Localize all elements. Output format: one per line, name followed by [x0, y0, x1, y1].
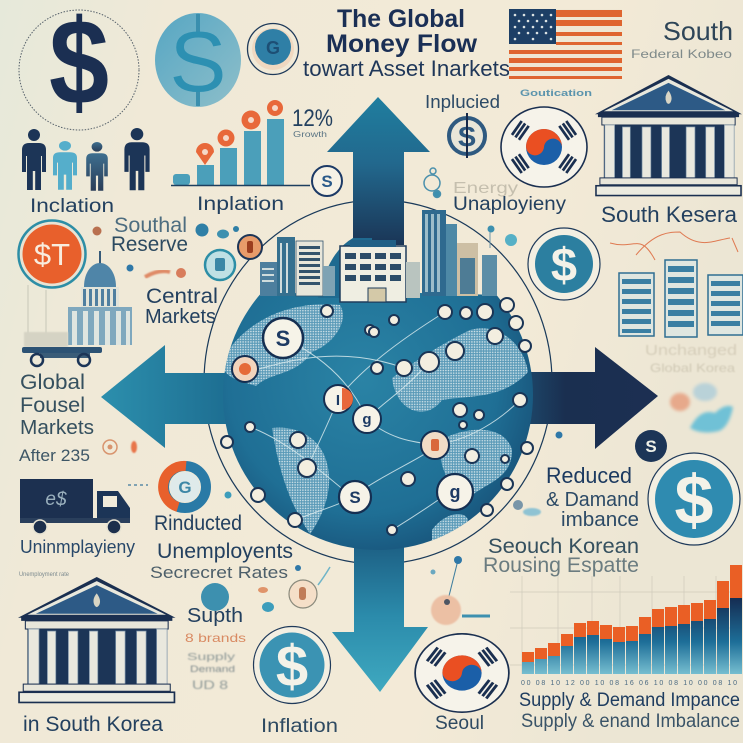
icon: navy S coin: S [645, 437, 657, 456]
icon: small teal link [424, 168, 440, 198]
label: Reduced & Demand imbalance: & Damand [546, 489, 639, 511]
flag: United States [509, 9, 622, 79]
title: The Global [337, 5, 465, 33]
icon: small coin ring [248, 24, 298, 74]
node: lower S coin: S [349, 488, 361, 507]
label: Supth & brands [185, 605, 246, 645]
flag: South Korea top [501, 107, 587, 187]
label: Seoul: Seoul [435, 713, 484, 734]
label: South Federal Korea: South [663, 16, 733, 46]
icon: orange $T coin: $T [34, 237, 70, 272]
icon: teal dollar disc [155, 13, 241, 110]
icon: teal ring coin [205, 250, 235, 280]
icon: truck: e$ [45, 489, 67, 510]
label: Inplucied: Inplucied [425, 92, 500, 112]
node: orange right coin [421, 431, 449, 459]
small orange ring icons [103, 440, 137, 454]
icon: teal blob [201, 583, 229, 611]
label: Seouch Korean Housing [483, 535, 639, 577]
label: Inflation: Inflation [261, 716, 338, 737]
label: tiny caption left: Unemployment rate [19, 572, 70, 578]
icon: large dollar coin right [648, 453, 740, 545]
icon: donut chart: G [178, 478, 192, 497]
label: Inplation: Inplation [197, 194, 284, 215]
icon: struck dollar coin [449, 113, 485, 158]
title: Money Flow [326, 30, 478, 58]
node: orange coin [232, 356, 258, 382]
faint scribble text: Demand [190, 664, 235, 674]
small icons around reserve [92, 224, 239, 278]
icon: dollar coin upper right: $ [551, 238, 577, 291]
icon: navy S coin [635, 430, 667, 462]
label: Reduced & Demand imbalance: Reduced [546, 463, 632, 488]
label: South Federal Korea: Federal Kobeo [631, 47, 732, 61]
label: Unemployieny: Uninmplayieny [20, 537, 135, 557]
label: Energy Unemployment: Energy [453, 180, 518, 197]
icon: large dollar coin right: $ [675, 461, 713, 539]
label: faint Unchanged Global Korea [645, 342, 737, 375]
node: lower S coin [339, 481, 371, 513]
faint scribble text [187, 652, 235, 692]
bar chart: growth [171, 100, 310, 186]
icon: small S coin: S [321, 172, 333, 191]
label: Rinducted Unemployents Rates: Unemployents [157, 540, 293, 563]
skyline buildings on globe [260, 210, 497, 302]
title [303, 5, 510, 81]
icon: large dollar in dotted circle [19, 0, 139, 130]
label: South Kesera: South Kesera [601, 202, 738, 227]
icon: donut chart [128, 466, 232, 508]
label: Seouch Korean Housing: Seouch Korean [488, 535, 639, 558]
label: Global Fousel Markets: Markets [20, 417, 94, 439]
icon: small coin ring: G [266, 38, 280, 58]
small icons near down arrow [258, 565, 330, 612]
icon: orange pin near down arrow [430, 556, 490, 625]
stacked bar chart: housing supply and demand: 00 08 10 12 00 10 08 16 06 10 08 10 00 08 10 [521, 680, 737, 687]
icon: faint truck under capitol [22, 347, 102, 366]
down arrow [332, 540, 428, 692]
node: S coin [263, 318, 303, 358]
label: Supth & brands: 8 brands [185, 631, 246, 645]
label: Rinducted Unemployents Rates: Secrecret Rates [150, 563, 288, 582]
label: Reduced & Demand imbalance: imbance [561, 509, 639, 531]
label: Global Fousel Markets: Fousel [20, 394, 85, 417]
label: Southal Reserve: Southal [114, 214, 187, 237]
stacked bar chart: housing supply and demand [510, 565, 742, 687]
icon: capitol building [24, 251, 132, 347]
up arrow [327, 97, 430, 245]
icon: central bank lower left [18, 577, 176, 702]
label: Central Markets: Markets [145, 306, 216, 328]
node: g coin: g [362, 411, 372, 428]
label: Energy Unemployment [453, 180, 567, 215]
faint scribble text: UD 8 [192, 678, 228, 692]
dots near skyline [488, 226, 517, 248]
label: Global Fousel Markets: Global [20, 371, 85, 394]
label: Inclation: Inclation [30, 196, 114, 217]
small icon: dotted link near globe base [513, 432, 562, 516]
continents [222, 304, 528, 548]
right arrow [515, 347, 658, 449]
icon: truck [20, 479, 130, 534]
node: g coin [353, 405, 381, 433]
label: Central Markets: Central [146, 285, 218, 308]
label: Southal Reserve: Reserve [111, 233, 188, 256]
orbit ring around globe [204, 200, 552, 564]
icon: dollar coin bottom [254, 626, 330, 704]
label: faint Unchanged Global Korea: Unchanged [645, 342, 737, 359]
icon: teal dollar disc: S [170, 15, 226, 110]
label: 12% growth [292, 105, 333, 139]
decorative blobs right [670, 383, 733, 432]
flag: Seoul South Korea [415, 634, 509, 712]
label: Reduced & Demand imbalance [546, 463, 639, 531]
label: Supth & brands: Supth [187, 605, 243, 627]
icon: central bank top right [595, 75, 742, 196]
label: in South Korea: in South Korea [23, 713, 163, 736]
title: towart Asset Inarkets [303, 56, 510, 81]
network nodes [221, 298, 533, 535]
node: g right coin [437, 474, 473, 510]
icon: small S coin [312, 166, 342, 196]
node: g right coin: g [450, 482, 460, 502]
node: I coin [324, 385, 353, 413]
icon: dollar coin upper right [528, 228, 600, 300]
left arrow [101, 345, 240, 448]
network lines [245, 312, 520, 530]
icon: dollar coin bottom: $ [276, 634, 308, 699]
node: S coin: S [276, 326, 290, 351]
icon: struck dollar coin: S [458, 121, 476, 152]
icon: orange ring coin [238, 235, 262, 259]
label: faint Unchanged Global Korea: Global Korea [650, 361, 735, 375]
label: Supply & enand Imbalance: Supply & enand Imbalance [521, 711, 740, 732]
icon: three buildings with trend line [610, 232, 743, 337]
label: Central Markets [145, 285, 218, 328]
label: Seouch Korean Housing: Rousing Espatte [483, 554, 639, 577]
label: 12% growth: 12% [292, 105, 333, 132]
label: Global Fousel Markets: After 235 [19, 446, 90, 465]
label: Goutication: Goutication [520, 88, 592, 98]
label: Energy Unemployment: Unaployieny [453, 194, 567, 215]
node: I coin: I [336, 392, 340, 409]
label: Rinducted Unemployents Rates: Rinducted [154, 512, 242, 535]
world globe [220, 293, 534, 548]
faint scribble text: Supply [187, 652, 235, 663]
label: Southal Reserve [111, 214, 188, 256]
label: Global Fousel Markets [19, 371, 94, 465]
people icons [22, 128, 150, 191]
label: 12% growth: Growth [293, 130, 327, 139]
icon: orange $T coin [18, 220, 86, 288]
label: South Federal Korea [631, 16, 733, 61]
label: Rinducted Unemployents Rates [150, 512, 293, 582]
